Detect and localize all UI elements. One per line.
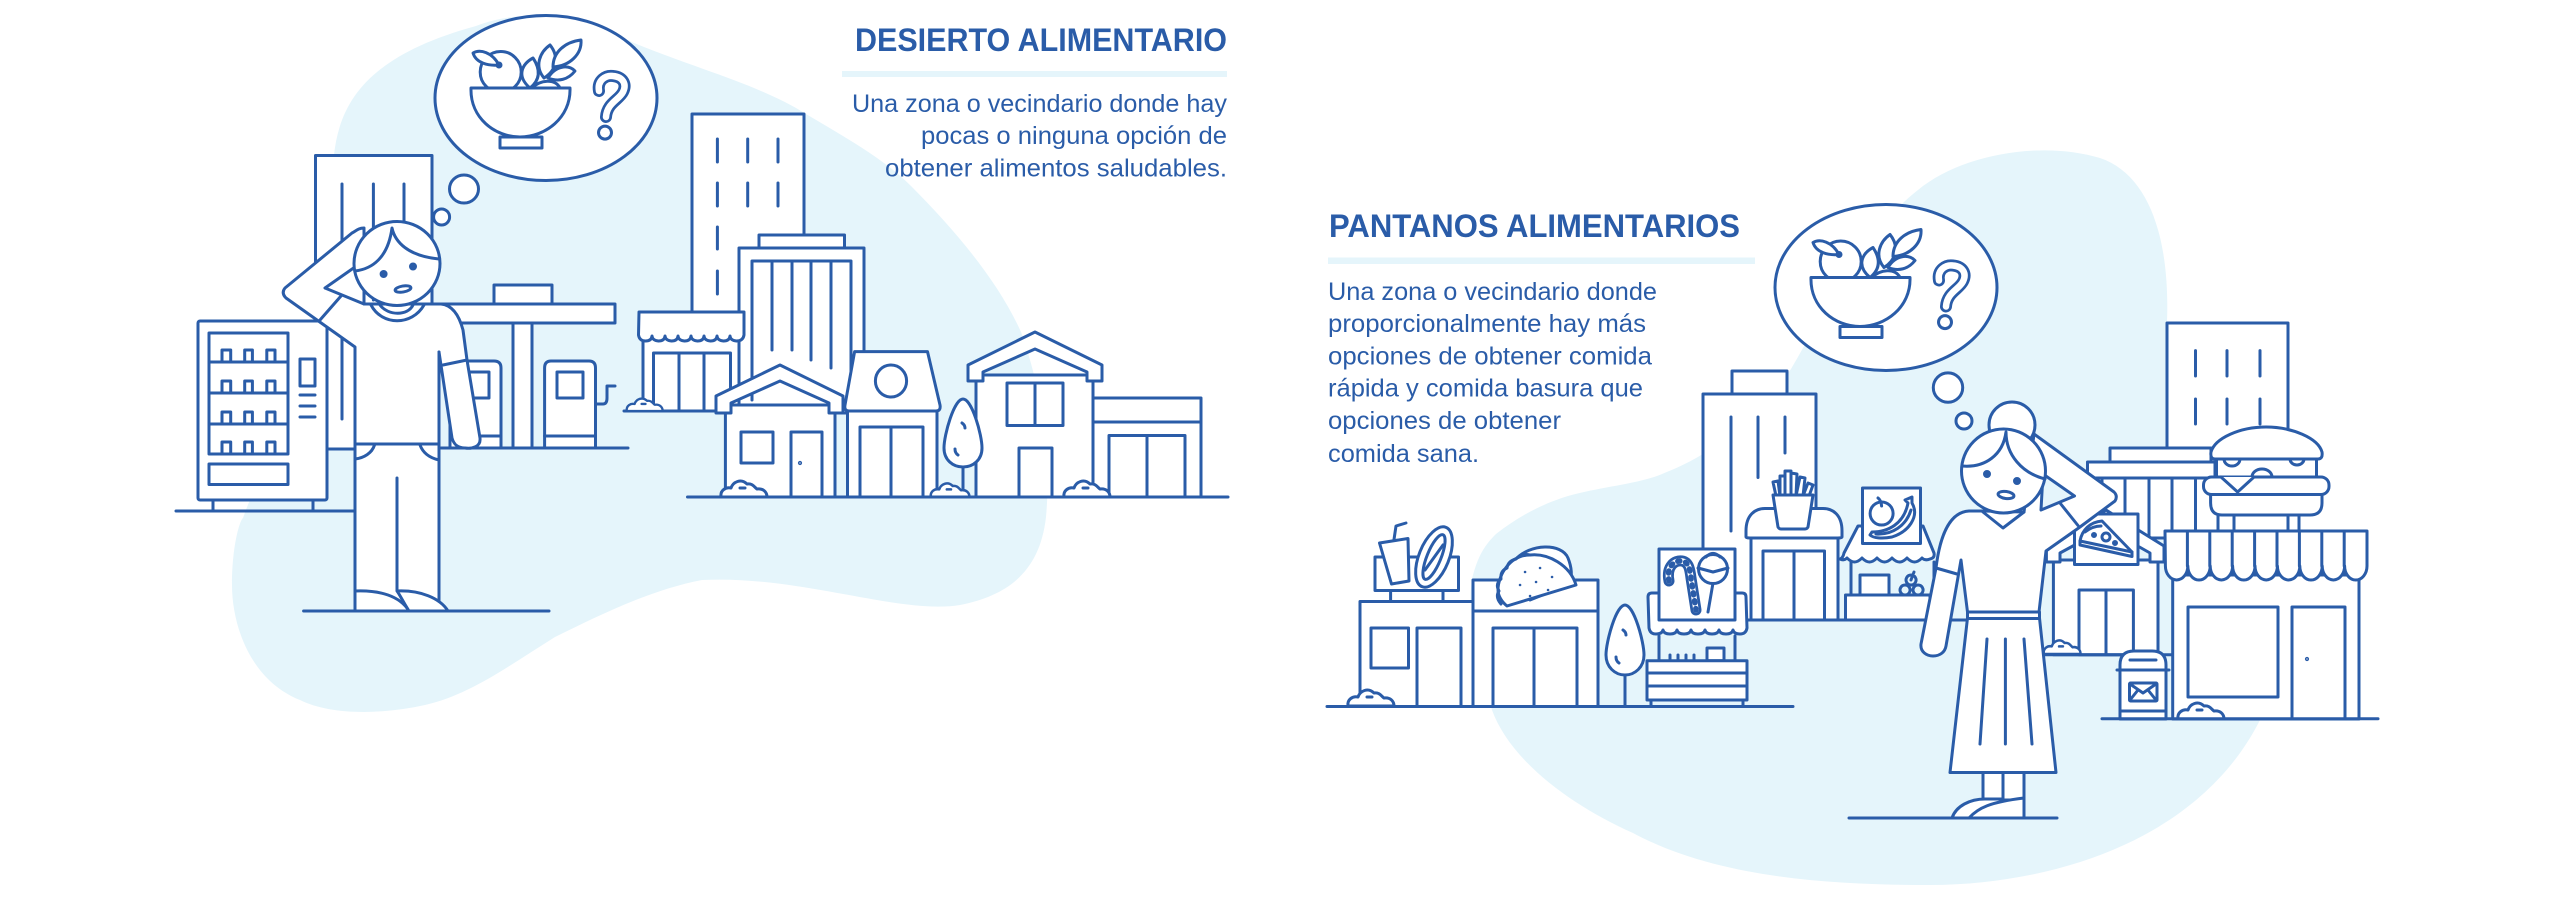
- bushes and ground: [688, 481, 1228, 497]
- tall tower: [2167, 323, 2288, 453]
- city block: desert: [624, 114, 1228, 497]
- ground line: [2102, 717, 2378, 720]
- big store with striped awning: [2165, 531, 2367, 719]
- garage: [1093, 398, 1201, 497]
- tall tower: [692, 114, 804, 314]
- thought bubble: desert: [434, 16, 657, 225]
- background blob: desert: [232, 16, 1048, 712]
- office building: [2088, 448, 2218, 538]
- man: legs and shoes: [304, 444, 549, 611]
- gas station: [441, 285, 628, 448]
- woman: head: [1962, 429, 2046, 513]
- burger sign: [2204, 427, 2329, 535]
- description: desierto: obtener alimentos saludables.: [885, 154, 1227, 182]
- tree: [1606, 605, 1644, 706]
- pizza house: [2043, 510, 2175, 655]
- woman: legs and shoes: [1849, 770, 2057, 818]
- building behind man: [316, 156, 432, 449]
- woman scratching her head: [1849, 402, 2116, 818]
- shop with awning: [624, 312, 744, 411]
- thought bubble: swamp: [1775, 204, 1997, 429]
- candy stall: [1647, 549, 1747, 706]
- office building: [739, 235, 864, 413]
- fast food store with drink and hot dog sign: [1360, 522, 1473, 706]
- title rule: pantanos: [1328, 258, 1755, 264]
- vending machine: [176, 321, 355, 511]
- fruit stall: [1840, 488, 1934, 620]
- street block: swamp left: [1327, 371, 1966, 706]
- description: desierto: Una zona o vecindario donde hay: [852, 90, 1227, 118]
- description: pantanos: [1328, 278, 1657, 468]
- house two: [968, 332, 1102, 497]
- description: pantanos: Una zona o vecindario donde: [1328, 278, 1657, 306]
- fries shop: [1746, 471, 1842, 620]
- description: pantanos: opciones de obtener comida: [1328, 343, 1652, 371]
- title: desierto alimentario: DESIERTO ALIMENTARIO: [855, 22, 1227, 58]
- man: head: [354, 222, 440, 306]
- bush and ground lines: [1327, 620, 1966, 706]
- street block: swamp right: [2043, 323, 2378, 719]
- description: desierto: pocas o ninguna opción de: [921, 122, 1227, 150]
- title rule: desierto: [842, 71, 1227, 77]
- taco store: [1473, 547, 1598, 706]
- woman: bun: [1989, 402, 2035, 448]
- title: pantanos alimentarios: PANTANOS ALIMENTARIOS: [1329, 208, 1740, 244]
- background blob: swamp: [1471, 150, 2263, 885]
- round window shop: [845, 352, 940, 497]
- house one: [716, 365, 843, 497]
- man scratching his head: [283, 222, 549, 611]
- woman: torso and arms: [1921, 434, 2116, 656]
- description: desierto: [852, 90, 1227, 182]
- mailbox: [2117, 651, 2169, 719]
- man: torso and arms: [283, 228, 480, 448]
- woman: skirt and belt: [1950, 612, 2056, 772]
- description: pantanos: opciones de obtener: [1328, 407, 1561, 435]
- tall building behind stalls: [1703, 371, 1816, 620]
- description: pantanos: comida sana.: [1328, 440, 1479, 468]
- description: pantanos: rápida y comida basura que: [1328, 375, 1643, 403]
- description: pantanos: proporcionalmente hay más: [1328, 310, 1646, 338]
- tree: [944, 399, 982, 497]
